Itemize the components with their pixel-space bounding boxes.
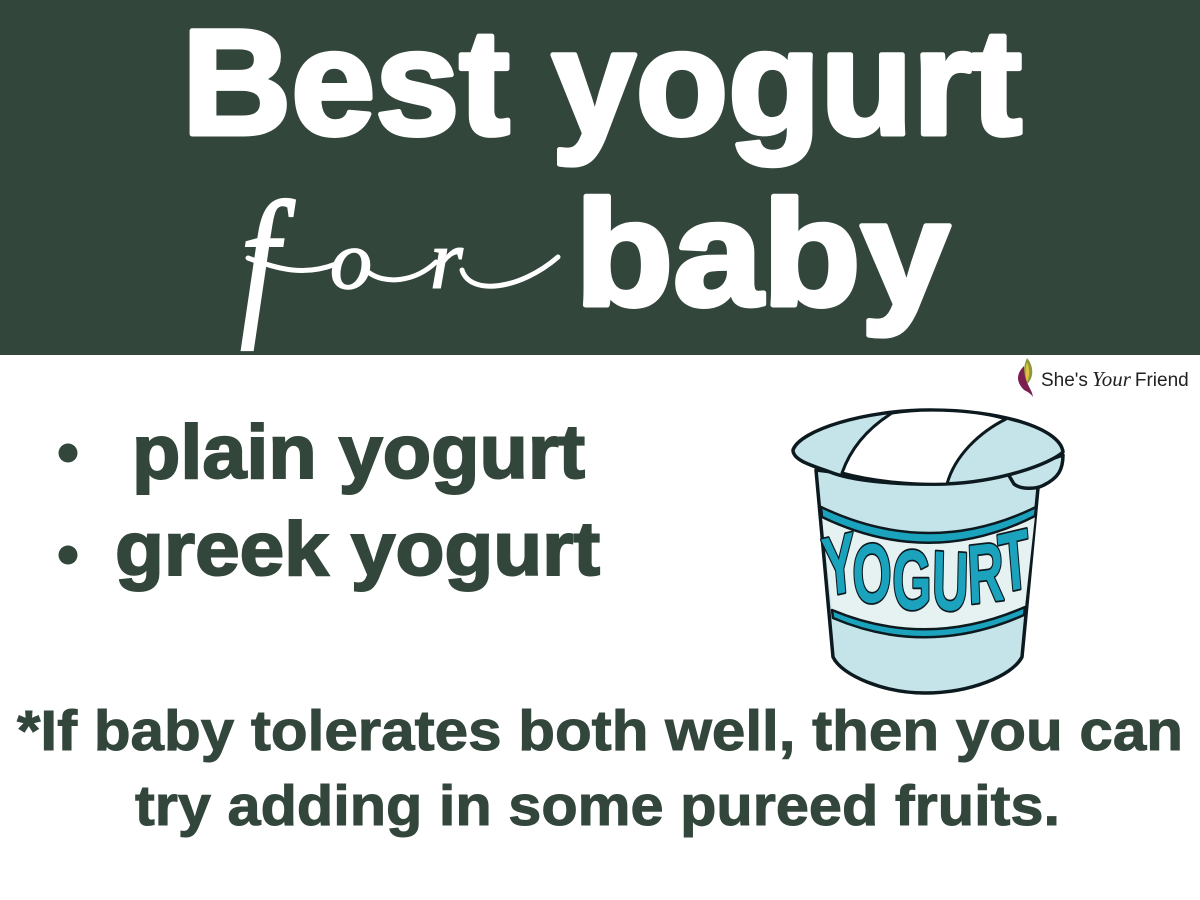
footnote: [17, 699, 1183, 838]
header band: [0, 0, 1200, 355]
script word: for: or: [330, 214, 463, 307]
cup label: [822, 516, 1035, 629]
logo: She's Your Friend: [1018, 358, 1189, 397]
lid tab: [1008, 455, 1063, 488]
bullet: plain yogurt: plain yogurt: [132, 410, 585, 495]
footnote line one: *If baby tolerates both well, then you can: [17, 699, 1183, 763]
upper band: [821, 507, 1036, 543]
title line one: Best yogurt: [182, 0, 1022, 166]
icon: yogurt cup: [793, 410, 1063, 693]
cup wordmark: YOGURT: [819, 510, 1034, 629]
bullet: greek yogurt: greek yogurt: [115, 507, 600, 592]
footnote line two: try adding in some pureed fruits.: [135, 774, 1060, 838]
script word: for: [240, 170, 558, 352]
logo wordmark: She'sYourFriend: [1041, 367, 1189, 391]
title line two: baby: [575, 169, 950, 337]
lower band: [832, 607, 1025, 637]
title: Best yogurt for baby: [182, 0, 1022, 352]
lid white stripe: [842, 410, 1006, 484]
script word: for: f: [240, 170, 296, 352]
lid: [793, 410, 1063, 484]
cup body: [816, 470, 1038, 693]
icon: logo leaves: [1018, 358, 1033, 397]
bullet list: [58, 410, 600, 592]
